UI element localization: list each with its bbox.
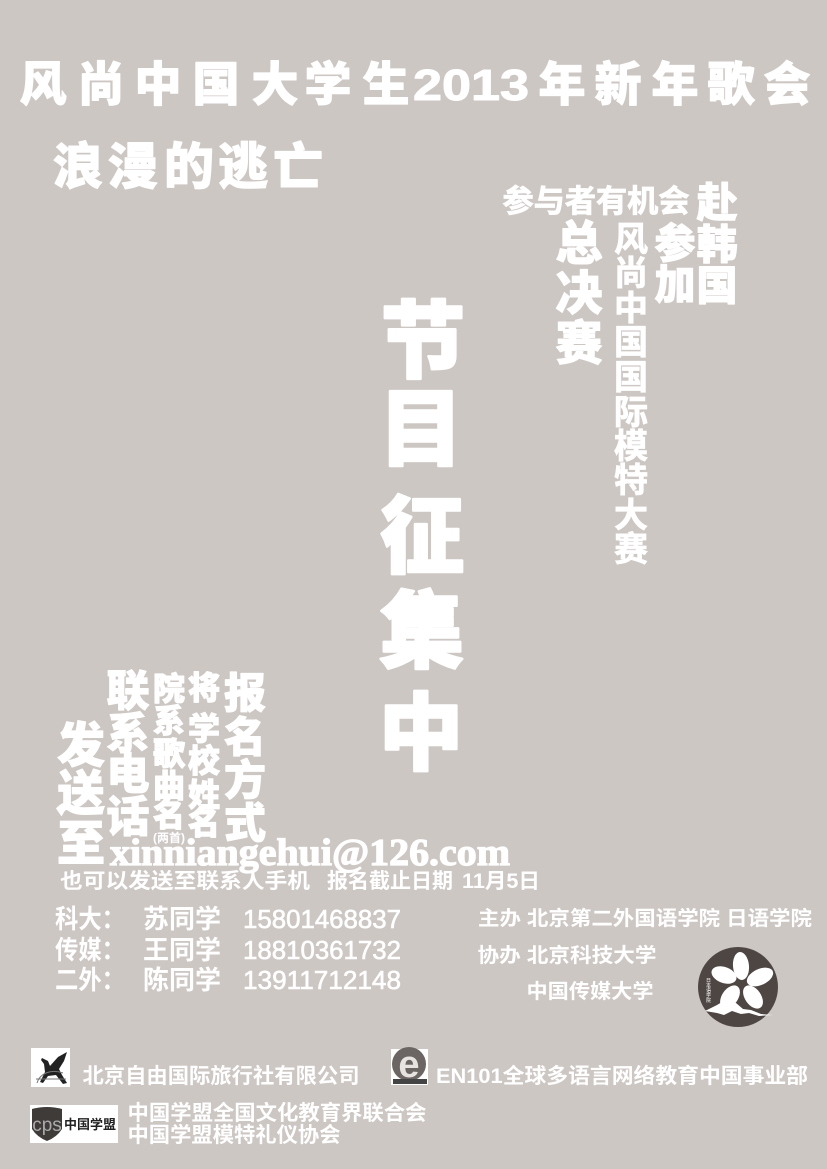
- title: 生: [362, 58, 410, 111]
- column: contact phone: 联: [106, 668, 150, 716]
- organizers: [478, 906, 812, 1003]
- title: 学: [304, 58, 352, 111]
- email: xinniangehui@126.com: [110, 832, 510, 874]
- contact: BISU: 13911712148: [243, 965, 401, 995]
- subtitle: 漫: [108, 139, 158, 195]
- column: finals: 赛: [556, 317, 602, 370]
- icon: cps logo: [30, 1105, 118, 1143]
- column: registration method: 报: [224, 670, 266, 717]
- column: go to Korea: 韩: [696, 222, 738, 268]
- subtitle: [53, 139, 323, 195]
- title: 尚: [78, 58, 124, 111]
- icon: e logo: e: [398, 1044, 420, 1086]
- title: 年: [538, 58, 586, 111]
- column: go to Korea: [696, 180, 738, 309]
- contact: USTB: 科大：: [55, 904, 125, 934]
- icon: cps logo: cps: [32, 1115, 62, 1136]
- title: 年: [652, 58, 698, 111]
- main heading: program call: 征: [380, 490, 464, 584]
- icon: cps logo: 中国学盟: [64, 1117, 116, 1132]
- column: finals: 总: [556, 217, 602, 270]
- column: go to Korea: 赴: [696, 180, 738, 226]
- contact: USTB: [55, 904, 401, 934]
- column: take part: 参: [654, 221, 696, 267]
- title: 会: [764, 58, 810, 111]
- column: model contest: 国: [614, 359, 648, 397]
- column: school name: 将: [188, 670, 220, 706]
- contact: CUC: 18810361732: [243, 935, 401, 965]
- subtitle: 的: [164, 139, 214, 195]
- contact: CUC: 传媒：: [55, 935, 125, 965]
- column: model contest: 大: [614, 497, 648, 535]
- column: finals: [556, 217, 602, 370]
- title: 风: [20, 58, 66, 111]
- column: registration method: 方: [224, 757, 266, 804]
- column: finals: 决: [556, 267, 602, 320]
- column: model contest: 模: [614, 428, 648, 466]
- title: 歌: [708, 58, 756, 111]
- sponsor name: EN101全球多语言网络教育中国事业部: [436, 1064, 808, 1088]
- column: go to Korea: 国: [696, 263, 738, 309]
- column: department and song: 歌: [153, 736, 186, 772]
- subtitle: 浪: [53, 139, 103, 195]
- column: department and song: 院: [153, 671, 185, 707]
- sponsor name: 北京自由国际旅行社有限公司: [82, 1064, 360, 1088]
- subtitle: 亡: [273, 139, 323, 195]
- icon: pegasus logo: [31, 1048, 70, 1087]
- column: registration method: 式: [224, 800, 266, 847]
- title: [20, 58, 810, 111]
- host: 主办 北京第二外国语学院 日语学院: [478, 906, 812, 930]
- column: model contest: 尚: [614, 255, 648, 293]
- column: model contest: 风: [614, 221, 648, 259]
- main heading: program call: 节: [381, 295, 465, 389]
- sponsor: travel agency: [31, 1048, 360, 1088]
- column: school name: 姓: [188, 777, 220, 813]
- title: 国: [192, 58, 240, 111]
- contacts: [55, 904, 401, 995]
- column: department and song: 曲: [153, 768, 185, 804]
- column: take part: 加: [654, 262, 696, 308]
- main heading: program call: 集: [380, 585, 464, 679]
- column: send to: 发: [57, 720, 105, 773]
- contact: BISU: 二外：: [55, 965, 125, 995]
- column: contact phone: 话: [106, 794, 150, 842]
- column: contact phone: 电: [106, 751, 150, 799]
- title: 中: [134, 58, 182, 111]
- column: contact phone: 系: [106, 711, 150, 759]
- icon: e logo: [391, 1044, 428, 1086]
- icon: school logo with cherry blossom: 日本语学院: [705, 978, 711, 1004]
- column: model contest: 特: [614, 462, 648, 500]
- note and deadline: 报名截止日期: [327, 870, 453, 893]
- note and deadline: 11月5日: [462, 870, 540, 893]
- icon: school logo with cherry blossom: [698, 947, 778, 1027]
- sponsor: EN101: [391, 1044, 808, 1088]
- contact: CUC: 王同学: [143, 935, 221, 965]
- column: send to: 至: [57, 818, 105, 871]
- column: contact phone: [106, 668, 150, 842]
- column: school name: 学: [188, 711, 220, 747]
- column: department and song: [153, 671, 186, 833]
- column: school name: 名: [188, 805, 220, 841]
- registration block: [56, 668, 540, 893]
- column: department and song: 名: [153, 797, 185, 833]
- column: send to: [56, 720, 105, 871]
- column: model contest: 中: [614, 290, 648, 328]
- column: model contest: [614, 221, 648, 569]
- title: 大: [252, 58, 298, 111]
- note and deadline: 也可以发送至联系人手机: [60, 870, 310, 893]
- note and deadline: [60, 870, 540, 893]
- title: 2013: [413, 61, 529, 110]
- contact: USTB: 苏同学: [143, 904, 221, 934]
- column: model contest: 赛: [614, 531, 648, 569]
- subtitle: 逃: [218, 139, 268, 195]
- column: model contest: 际: [614, 394, 648, 432]
- contact: BISU: [55, 965, 401, 995]
- sponsor: China Student League: [30, 1101, 426, 1147]
- column: registration method: 名: [224, 714, 266, 761]
- column: school name: [188, 670, 220, 841]
- co-host 2: 中国传媒大学: [526, 980, 654, 1003]
- sponsor name 2: 中国学盟模特礼仪协会: [128, 1123, 340, 1147]
- column: model contest: 国: [614, 324, 648, 362]
- co-host 1: 协办 北京科技大学: [478, 943, 656, 967]
- note: two songs: (两首): [153, 830, 185, 845]
- sponsor name 1: 中国学盟全国文化教育界联合会: [128, 1101, 426, 1125]
- text block: Korea opportunity: [502, 180, 738, 569]
- column: send to: 送: [56, 768, 105, 821]
- contact: USTB: 15801468837: [243, 904, 401, 934]
- column: take part: [654, 221, 696, 308]
- title: 新: [594, 58, 642, 111]
- participants line: 参与者有机会: [502, 184, 690, 219]
- main heading: program call: 中: [379, 687, 463, 781]
- column: registration method: [224, 670, 266, 847]
- column: department and song: 系: [153, 703, 185, 739]
- main heading: program call: [379, 295, 465, 781]
- contact: BISU: 陈同学: [143, 965, 221, 995]
- main heading: program call: 目: [379, 383, 463, 477]
- column: school name: 校: [188, 743, 220, 779]
- contact: CUC: [55, 935, 401, 965]
